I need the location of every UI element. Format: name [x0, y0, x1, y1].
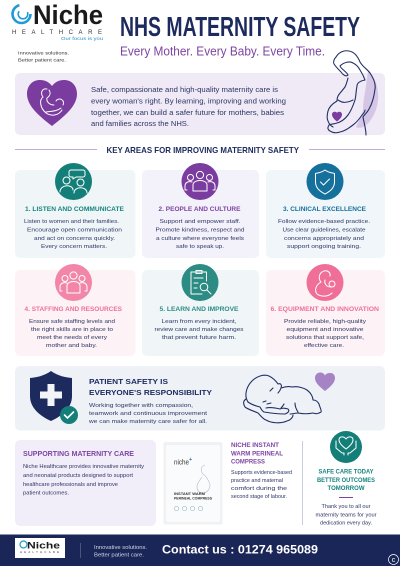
panel: 5 learn and improve: that prevent future harm. — [162, 335, 236, 341]
panel: safe care today: TOMORROW — [328, 486, 365, 492]
panel: 6 equipment and innovation: Provide reliable, high-quality — [284, 319, 366, 325]
icon: shield with tick — [306, 163, 344, 200]
icon: staff group — [55, 264, 92, 301]
copyright symbol: c — [392, 557, 396, 564]
panel: supporting maternity care: and neonatal products designed to support — [23, 473, 134, 479]
panel: 2 people and culture: Promote kindness, respect and — [156, 228, 244, 234]
panel: safe care today: dedication every day. — [320, 520, 372, 526]
panel: 4 staffing and resources: mother and baby. — [46, 343, 97, 349]
panel: 6 equipment and innovation — [266, 264, 385, 356]
tagline: Innovative solutions. — [18, 50, 69, 56]
product description: WARM PERINEAL — [231, 451, 283, 457]
panel: 1 listen and communicate: Encourage open communication — [27, 228, 122, 234]
illustration: sleeping baby — [244, 375, 321, 423]
product description: practice and maternal — [231, 478, 283, 484]
icon: people talking — [55, 163, 92, 200]
icon: mother and baby — [306, 264, 344, 301]
banner heading: EVERYONE'S RESPONSIBILITY — [89, 388, 212, 397]
footer logo: Niche — [27, 540, 60, 552]
product: perineal compress pack: niche — [174, 460, 189, 466]
icon: group of people — [182, 163, 218, 200]
banner text: teamwork and continuous improvement — [89, 411, 208, 417]
panel: 1 listen and communicate: Every concern matters. — [41, 244, 107, 250]
icon: shield with cross and tick — [30, 371, 78, 424]
banner text: Working together with compassion, — [89, 403, 194, 409]
footer logo: HEALTHCARE — [20, 550, 59, 554]
panel: safe care today: Thank you to all our — [322, 504, 371, 510]
panel: 3 clinical excellence: Use clear guidelines, escalate — [282, 228, 366, 234]
banner text — [88, 403, 208, 425]
panel: safe care today: SAFE CARE TODAY — [318, 470, 374, 476]
product: perineal compress pack: PERINEAL COMPRESS — [174, 496, 213, 500]
product description: Supports evidence-based — [231, 470, 292, 476]
panel: 5 learn and improve: Learn from every incident, — [162, 319, 237, 325]
subtitle: Every Mother. Every Baby. Every Time. — [120, 44, 325, 58]
product: perineal compress pack: + — [189, 457, 192, 463]
footer tagline — [94, 545, 147, 558]
panel: 1 listen and communicate: and act on concerns quickly. — [34, 236, 115, 242]
panel: supporting maternity care: Niche Healthcare provides innovative maternity — [23, 464, 144, 470]
panel: supporting maternity care: SUPPORTING MATERNITY CARE — [23, 449, 134, 458]
panel: 2 people and culture: safe to speak up. — [176, 244, 224, 250]
product description: COMPRESS — [231, 460, 265, 466]
footer — [0, 534, 400, 566]
copyright symbol — [388, 554, 398, 564]
panel: 1 listen and communicate: 1. LISTEN AND COMMUNICATE — [25, 206, 124, 213]
panel: 1 listen and communicate: Listen to women and their families. — [24, 219, 119, 225]
banner heading: PATIENT SAFETY IS — [89, 377, 168, 386]
footer tagline: Innovative solutions. — [94, 545, 147, 551]
logo: Niche Healthcare: HEALTHCARE — [12, 30, 102, 36]
product description: second stage of labour. — [231, 494, 287, 500]
footer tagline: Better patient care. — [94, 552, 144, 558]
banner text: we can make maternity care safer for all. — [88, 419, 208, 425]
icon: heart in hands — [330, 431, 362, 463]
tagline: Better patient care. — [18, 58, 66, 62]
intro text: together, we can build a safer future for mothers, babies — [91, 108, 284, 117]
logo: Niche Healthcare — [12, 0, 104, 41]
panel: 3 clinical excellence: concerns appropriately and — [284, 236, 364, 242]
panel: 2 people and culture — [142, 163, 259, 258]
panel: 4 staffing and resources — [15, 264, 136, 356]
intro text: every woman's right. By learning, improving and working — [91, 96, 286, 106]
panel: 2 people and culture: 2. PEOPLE AND CULTURE — [158, 206, 240, 213]
icon: purple heart — [315, 372, 335, 391]
panel: 4 staffing and resources: Ensure safe staffing levels and — [29, 319, 115, 325]
panel: 3 clinical excellence: support ongoing training. — [287, 244, 361, 250]
panel: supporting maternity care — [15, 440, 156, 526]
panel: safe care today — [316, 431, 377, 526]
panel: introduction — [15, 73, 385, 135]
footer logo — [15, 538, 65, 558]
panel: 3 clinical excellence: Follow evidence-based practice. — [278, 219, 370, 225]
panel: 4 staffing and resources: meet the needs of every — [37, 335, 107, 341]
product description: NICHE INSTANT — [231, 443, 279, 449]
panel: 6 equipment and innovation: equipment and innovative — [286, 327, 364, 333]
logo: Niche Healthcare: Our focus is you — [61, 36, 104, 41]
panel: 6 equipment and innovation: effective care. — [304, 343, 344, 349]
tagline — [18, 50, 69, 62]
panel: 1 listen and communicate — [15, 163, 136, 258]
panel: safe care today: BETTER OUTCOMES — [317, 478, 375, 484]
panel: 2 people and culture: Support and empower staff. — [160, 219, 241, 225]
panel: 3 clinical excellence: 3. CLINICAL EXCELLENCE — [283, 206, 366, 213]
product: perineal compress pack — [164, 442, 222, 524]
illustration: pregnant woman — [327, 51, 378, 135]
banner heading — [89, 377, 212, 397]
icon: heart with mother and baby — [27, 80, 77, 126]
intro text: and families across the NHS. — [91, 119, 189, 128]
panel: safe care today: maternity teams for your — [316, 512, 377, 518]
product description: comfort during the — [231, 486, 287, 492]
contact number: Contact us : 01274 965089 — [162, 542, 318, 556]
panel: 3 clinical excellence — [266, 163, 385, 258]
panel: 6 equipment and innovation: solutions that support safe, — [286, 335, 364, 341]
panel: 4 staffing and resources: 4. STAFFING AND RESOURCES — [24, 306, 122, 313]
panel: 5 learn and improve: 5. LEARN AND IMPROVE — [160, 306, 238, 313]
intro text — [91, 85, 286, 128]
intro text: Safe, compassionate and high-quality maternity care is — [91, 85, 278, 94]
panel: supporting maternity care: healthcare professionals and improve — [23, 482, 118, 488]
panel: 6 equipment and innovation: 6. EQUIPMENT AND INNOVATION — [270, 306, 379, 313]
logo: Niche Healthcare: Niche — [33, 0, 103, 30]
product description — [231, 443, 292, 500]
panel: patient safety banner — [15, 366, 385, 430]
icon: clipboard with magnifier — [182, 264, 218, 301]
panel: 2 people and culture: a culture where everyone feels — [156, 236, 244, 242]
heading: key areas: KEY AREAS FOR IMPROVING MATERNITY SAFETY — [106, 145, 299, 155]
product: perineal compress pack: INSTANT WARM — [174, 492, 205, 496]
panel: 4 staffing and resources: the right skills are in place to — [31, 327, 114, 333]
panel: 5 learn and improve — [142, 264, 259, 356]
panel: 5 learn and improve: review care and make changes — [154, 327, 244, 333]
panel: supporting maternity care: patient outcomes. — [23, 490, 69, 496]
